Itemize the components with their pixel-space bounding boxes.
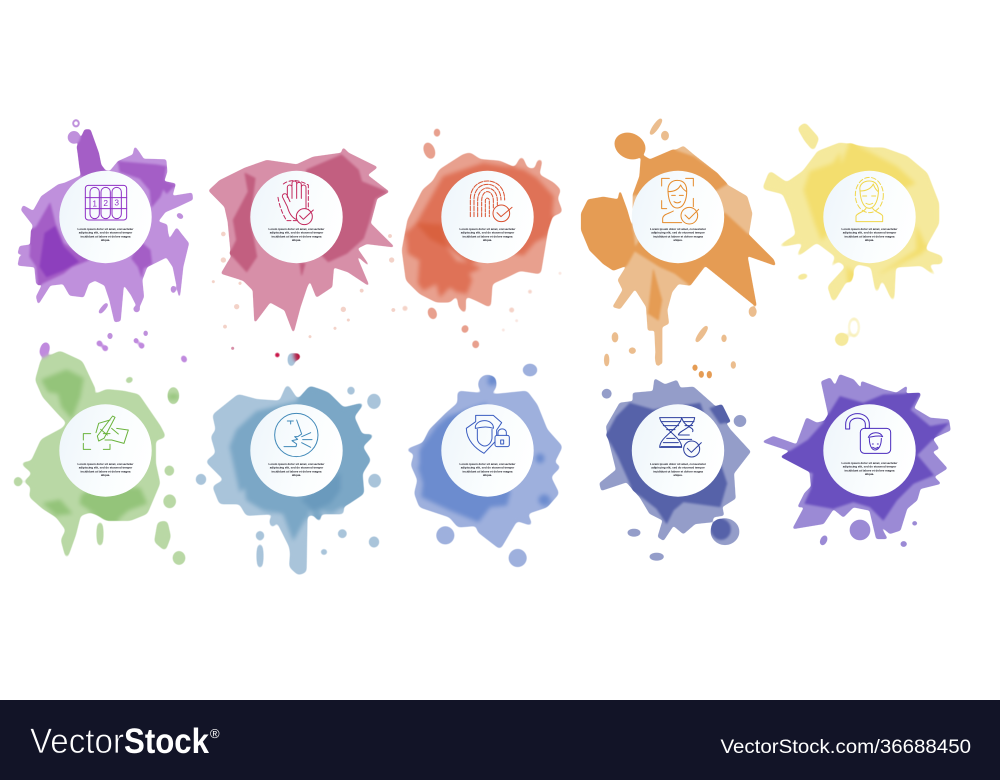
caption: incididunt ut labore et dolore magna xyxy=(463,469,513,473)
splash: rose xyxy=(209,148,395,350)
icon: open padlock with face xyxy=(846,414,891,453)
caption: Lorem ipsum dolor sit amet, consectetur xyxy=(78,462,134,466)
panel: green splash with signature xyxy=(14,338,188,564)
circle xyxy=(59,171,152,263)
splash: purple xyxy=(18,120,192,353)
caption: Lorem ipsum dolor sit amet, consectetur xyxy=(78,227,134,231)
caption: incididunt ut labore et dolore magna xyxy=(845,234,895,238)
panel: orange splash with face scan xyxy=(582,118,775,370)
circle xyxy=(250,404,343,497)
icon: face scan with check xyxy=(662,178,699,224)
caption: aliqua. xyxy=(483,238,492,242)
splash: green xyxy=(14,338,188,564)
circle xyxy=(823,171,916,263)
panel: periwinkle splash with shield and lock xyxy=(407,364,562,566)
caption: aliqua. xyxy=(292,473,301,477)
caption: adipiscing elit, sed do eiusmod tempor xyxy=(79,466,133,470)
caption: Lorem ipsum dolor sit amet, consectetur xyxy=(650,462,707,466)
image id: VectorStock.com/36688450 xyxy=(720,736,971,758)
caption: aliqua. xyxy=(673,238,683,242)
caption: incididunt ut labore et dolore magna xyxy=(81,234,131,238)
circle xyxy=(250,171,343,263)
caption: Lorem ipsum dolor sit amet, consectetur xyxy=(460,462,516,466)
splash: orange xyxy=(582,118,775,370)
logo: registered mark: ® xyxy=(210,726,220,741)
caption: Lorem ipsum dolor sit amet, consectetur xyxy=(842,461,898,465)
panel: violet splash with open padlock xyxy=(763,375,950,546)
icon: face shield and padlock xyxy=(466,415,509,453)
caption: incididunt ut labore et dolore magna xyxy=(653,469,703,473)
circle xyxy=(441,171,534,263)
splash: steel blue xyxy=(196,353,380,574)
caption: adipiscing elit, sed do eiusmod tempor xyxy=(843,465,897,469)
icon: hand with check xyxy=(278,181,313,225)
icon: 123 combination lock: 3 xyxy=(114,198,119,208)
panel: purple splash with 123 combination lock xyxy=(18,120,192,353)
circle xyxy=(632,171,724,263)
circle xyxy=(632,404,724,497)
caption: adipiscing elit, sed do eiusmod tempor xyxy=(461,466,515,470)
splash: periwinkle xyxy=(407,364,562,566)
caption: aliqua. xyxy=(101,473,110,477)
caption: incididunt ut labore et dolore magna xyxy=(845,468,895,472)
panel: coral splash with fingerprint xyxy=(402,129,562,348)
caption: Lorem ipsum dolor sit amet, consectetur xyxy=(269,462,325,466)
panel: blue splash with speaking profile xyxy=(196,353,380,574)
circle xyxy=(59,404,152,497)
panel: yellow splash with face outline xyxy=(763,123,942,345)
circle xyxy=(823,404,916,497)
caption: aliqua. xyxy=(865,238,874,242)
caption: aliqua. xyxy=(292,238,301,242)
caption: aliqua. xyxy=(865,472,874,476)
caption: Lorem ipsum dolor sit amet, consectetur xyxy=(269,227,325,231)
icon: fingerprint with check xyxy=(470,181,512,222)
logo: bold part: Stock xyxy=(124,722,209,761)
caption: aliqua. xyxy=(101,238,110,242)
splash: violet xyxy=(763,375,950,546)
panel: rose splash with hand scan xyxy=(209,148,395,350)
caption: adipiscing elit, sed do eiusmod tempor xyxy=(651,231,706,235)
caption: adipiscing elit, sed do eiusmod tempor xyxy=(270,466,324,470)
caption: Lorem ipsum dolor sit amet, consectetur xyxy=(650,227,707,231)
logo: VectorStock: Vector xyxy=(30,722,124,761)
caption: aliqua. xyxy=(483,473,492,477)
footer bar xyxy=(0,700,1000,780)
caption: Lorem ipsum dolor sit amet, consectetur xyxy=(460,227,516,231)
caption: adipiscing elit, sed do eiusmod tempor xyxy=(461,231,515,235)
caption: incididunt ut labore et dolore magna xyxy=(653,234,703,238)
panel: indigo splash with DNA xyxy=(600,349,750,560)
caption: incididunt ut labore et dolore magna xyxy=(81,469,131,473)
icon: speaking face profile xyxy=(275,413,318,457)
caption: Lorem ipsum dolor sit amet, consectetur xyxy=(842,227,898,231)
caption: incididunt ut labore et dolore magna xyxy=(463,234,513,238)
caption: adipiscing elit, sed do eiusmod tempor xyxy=(651,466,706,470)
caption: adipiscing elit, sed do eiusmod tempor xyxy=(270,231,324,235)
caption: aliqua. xyxy=(673,473,683,477)
caption: adipiscing elit, sed do eiusmod tempor xyxy=(843,231,897,235)
caption: incididunt ut labore et dolore magna xyxy=(272,469,322,473)
icon: 123 combination lock xyxy=(85,185,127,220)
icon: 123 combination lock: 1 xyxy=(92,199,97,209)
icon: 123 combination lock: 2 xyxy=(103,198,108,208)
circle xyxy=(441,404,534,497)
icon: face with dashed outline xyxy=(855,177,883,222)
splash: coral xyxy=(402,129,562,348)
splash: indigo xyxy=(600,349,750,560)
caption: incididunt ut labore et dolore magna xyxy=(272,234,322,238)
icon: DNA with check xyxy=(660,418,701,457)
icon: hand signing with pen xyxy=(83,416,128,449)
caption: adipiscing elit, sed do eiusmod tempor xyxy=(79,231,133,235)
splash: yellow xyxy=(763,123,942,345)
